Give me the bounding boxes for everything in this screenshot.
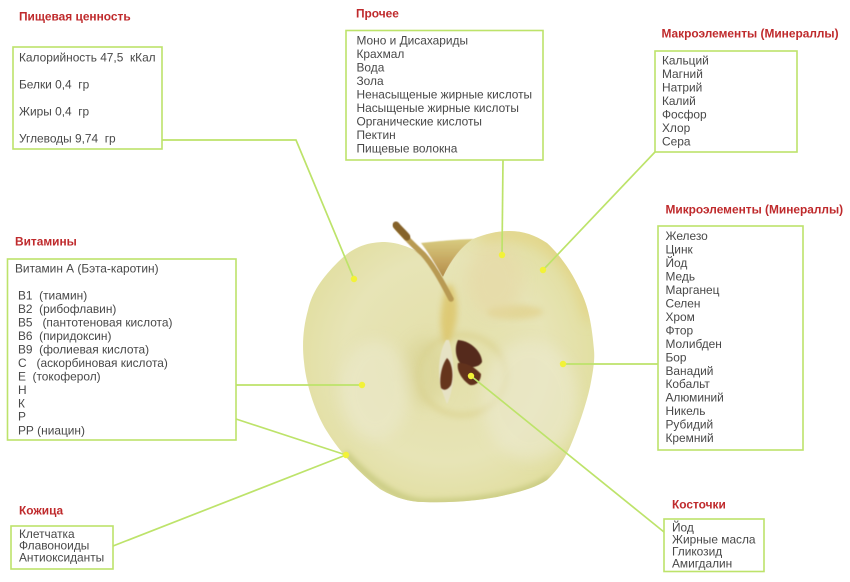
panel: macroelements: Натрий: [662, 80, 702, 94]
panel: microelements: Цинк: [666, 242, 694, 256]
panel: microelements: Фтор: [666, 324, 693, 338]
panel: macroelements: Хлор: [662, 121, 691, 135]
panel: seeds: Гликозид: [672, 544, 722, 558]
panel: other: Вода: [356, 60, 385, 74]
panel: seeds: Жирные масла: [672, 532, 756, 546]
panel: macroelements: [655, 51, 797, 152]
panel: other: Ненасыщеные жирные кислоты: [356, 88, 532, 102]
panel: microelements: Молибден: [666, 337, 722, 351]
panel: microelements: Йод: [666, 255, 687, 270]
panel: nutritional value: Белки 0,4 гр: [19, 78, 90, 92]
panel: macroelements: Сера: [662, 134, 691, 148]
apple flesh: [303, 231, 594, 502]
panel: other: Пищевые волокна: [356, 142, 458, 156]
heading: macroelements: Макроэлементы (Минераллы): [662, 26, 839, 40]
panel: vitamins: В2 (рибофлавин): [18, 302, 116, 316]
panel: seeds: Йод: [672, 520, 694, 534]
panel: microelements: Хром: [666, 310, 695, 324]
panel: other: Насыщеные жирные кислоты: [356, 101, 519, 115]
apple shading: [340, 233, 590, 502]
panel: skin: Клетчатка: [19, 527, 75, 541]
apple photo: [303, 225, 594, 502]
panel: vitamins: Р: [18, 410, 26, 424]
panel: vitamins: РР (ниацин): [18, 424, 85, 438]
panel: macroelements: Калий: [662, 94, 696, 108]
panel: vitamins: С (аскорбиновая кислота): [18, 356, 168, 370]
panel: microelements: Медь: [666, 270, 695, 284]
panel: other: [346, 30, 543, 160]
apple stem cavity: [421, 239, 474, 278]
panel: nutritional value: [13, 47, 162, 149]
panel: seeds: Амигдалин: [672, 556, 732, 570]
panel: vitamins: Н: [18, 383, 27, 397]
heading: nutritional value: Пищевая ценность: [19, 10, 131, 24]
panel: skin: [11, 526, 113, 569]
marker dots: [343, 252, 566, 458]
panel: nutritional value: Жиры 0,4 гр: [19, 104, 90, 118]
panel: skin: Антиоксиданты: [19, 550, 104, 564]
panel: vitamins: Витамин А (Бэта-каротин): [15, 262, 159, 276]
panel: microelements: Никель: [666, 404, 705, 418]
panel: other: Пектин: [356, 128, 396, 142]
panel: other: Моно и Дисахариды: [356, 34, 468, 48]
heading: other: Прочее: [356, 6, 399, 20]
panel: vitamins: В9 (фолиевая кислота): [18, 342, 149, 356]
panel: vitamins: К: [18, 396, 25, 410]
panel: vitamins: В1 (тиамин): [18, 288, 87, 302]
panel: seeds: [664, 519, 764, 572]
panel: vitamins: Е (токоферол): [18, 370, 101, 384]
panel: other: Органические кислоты: [356, 114, 482, 128]
panel: other: Зола: [356, 74, 384, 88]
heading: microelements: Микроэлементы (Минераллы): [666, 202, 843, 216]
seeds: [440, 340, 482, 390]
leader lines: [113, 140, 664, 546]
apple stem: [396, 226, 451, 299]
panel: vitamins: В5 (пантотеновая кислота): [18, 316, 172, 330]
panel: skin: Флавоноиды: [19, 538, 89, 552]
panel: microelements: Кремний: [666, 431, 714, 445]
panel: nutritional value: Углеводы 9,74 гр: [19, 132, 116, 146]
panel: nutritional value: Калорийность 47,5 кКал: [19, 50, 156, 64]
panel: microelements: Марганец: [666, 283, 720, 297]
heading: vitamins: Витамины: [15, 234, 77, 248]
panel: vitamins: [8, 259, 236, 440]
panel: macroelements: Кальций: [662, 54, 709, 68]
panel: other: Крахмал: [356, 47, 404, 61]
apple seed cavity: [439, 340, 453, 404]
panel: microelements: Селен: [666, 296, 700, 310]
heading: skin: Кожица: [19, 504, 64, 518]
panel: microelements: Железо: [666, 229, 708, 243]
panel: vitamins: В6 (пиридоксин): [18, 329, 111, 343]
panel: microelements: Кобальт: [666, 377, 710, 391]
panel: microelements: Ванадий: [666, 364, 713, 378]
heading: seeds: Косточки: [672, 498, 726, 512]
panel: microelements: Бор: [666, 350, 687, 364]
panel: microelements: Алюминий: [666, 391, 724, 405]
panel: macroelements: Фосфор: [662, 108, 707, 122]
panel: macroelements: Магний: [662, 67, 703, 81]
panel: microelements: [658, 226, 803, 450]
panel: microelements: Рубидий: [666, 418, 713, 432]
